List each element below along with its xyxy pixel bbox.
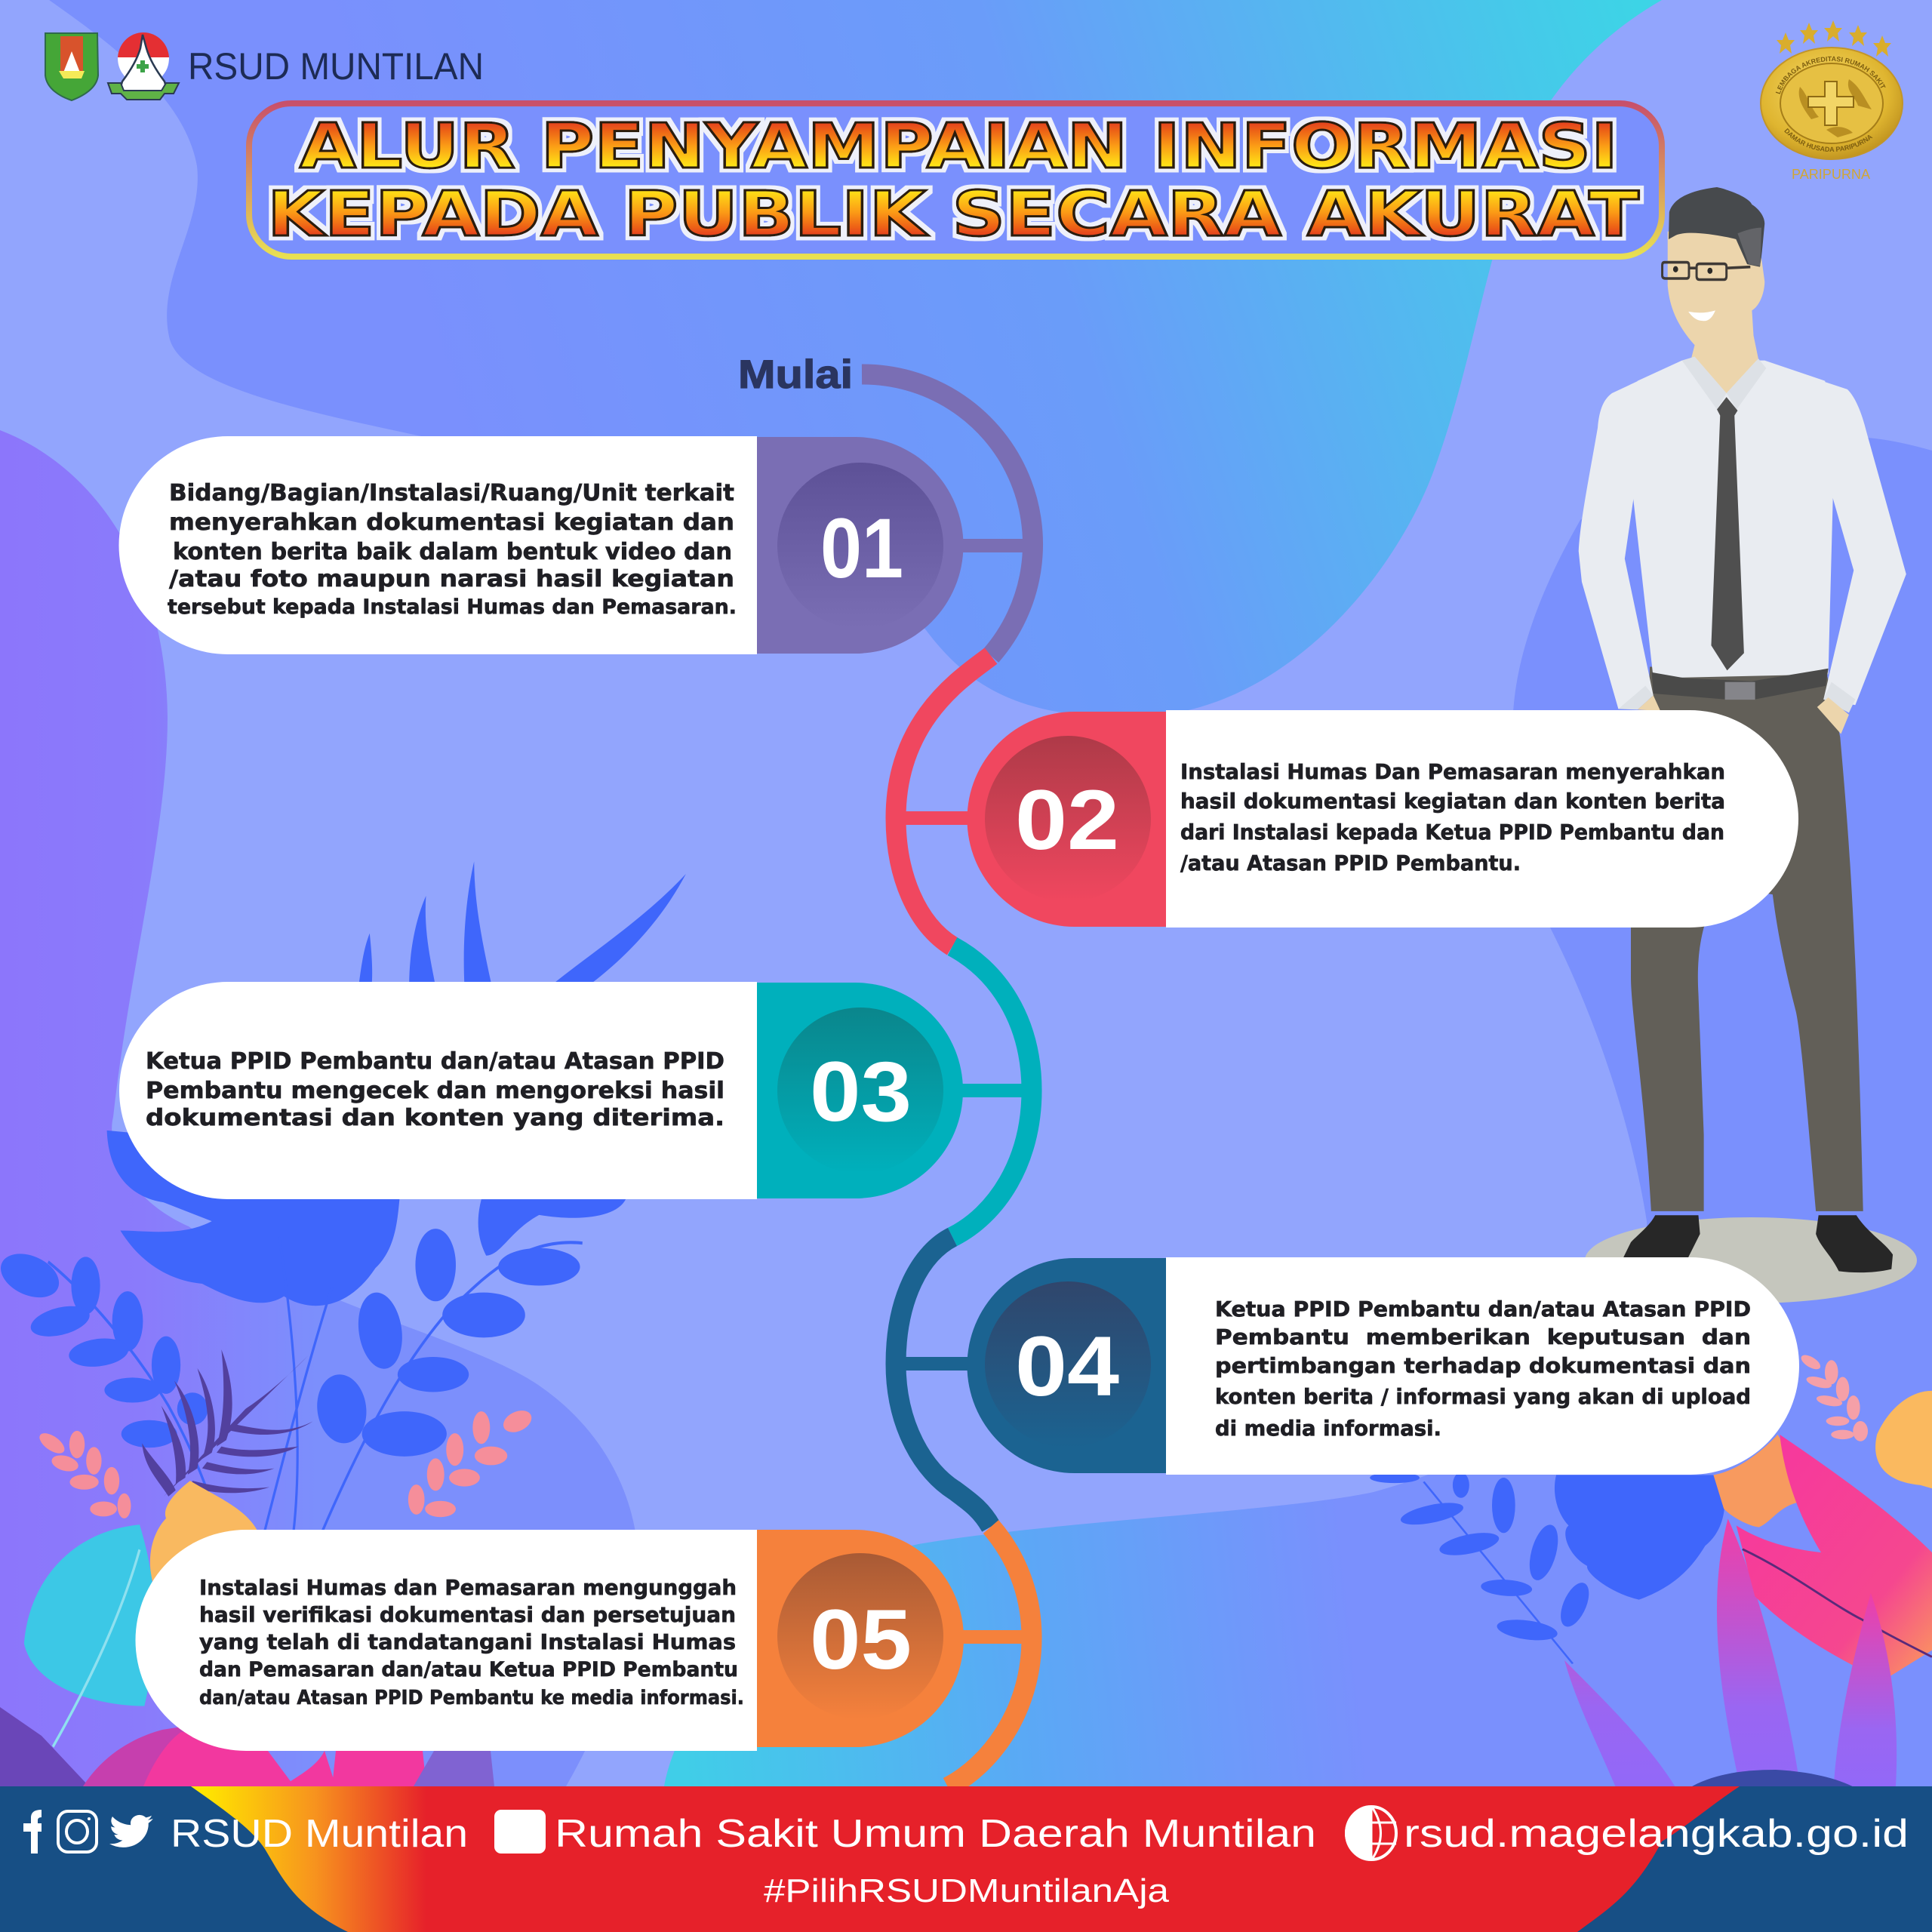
number: 02 [1015, 773, 1119, 867]
title box [249, 103, 1662, 257]
blue fronds above card 03 [358, 861, 686, 986]
red dome [118, 32, 169, 59]
white pill [1166, 1257, 1799, 1475]
number disc [777, 463, 943, 629]
spine segment 03 [952, 946, 1032, 1237]
step text: Pembantu memberikan keputusan dan [1215, 1324, 1751, 1349]
connector [902, 811, 974, 825]
green cross [137, 60, 149, 72]
step text: tersebut kepada Instalasi Humas dan Pemasaran. [168, 595, 737, 619]
step text [199, 1575, 744, 1709]
logo: RSUD stupa [108, 32, 179, 100]
ground shadow [1585, 1217, 1917, 1303]
hashtag: #PilihRSUDMuntilanAja [764, 1872, 1170, 1909]
yellow leaf [1875, 1391, 1932, 1488]
panel: step 01 [119, 436, 1026, 654]
tie [1711, 397, 1744, 670]
footer blue base [0, 1786, 1932, 1932]
gold coin [1761, 48, 1903, 159]
legs and shoes [1623, 667, 1893, 1272]
number disc [985, 736, 1151, 902]
spine segment 04 [896, 1237, 991, 1527]
brand name: RSUD MUNTILAN [188, 45, 484, 88]
white pill [1166, 710, 1798, 928]
step text: /atau foto maupun narasi hasil kegiatan [169, 566, 734, 592]
coin map blotches [1799, 79, 1872, 137]
man illustration [1579, 187, 1917, 1303]
trousers [1631, 667, 1863, 1211]
plants: bottom right cluster [1370, 1352, 1932, 1789]
collar [1682, 357, 1766, 409]
magenta leaf [83, 1724, 298, 1786]
step text: di media informasi. [1215, 1416, 1441, 1441]
connector [958, 539, 1026, 552]
number disc [985, 1281, 1151, 1447]
step text: dan/atau Atasan PPID Pembantu ke media informasi. [199, 1687, 744, 1709]
shield stupa [63, 51, 80, 72]
left shoe [1623, 1215, 1700, 1259]
number: 01 [820, 501, 903, 595]
number block [968, 712, 1166, 927]
green ribbon [108, 83, 179, 100]
tall violet leaves [1564, 1518, 1801, 1789]
number block [757, 437, 963, 654]
panel: step 04 [902, 1257, 1799, 1475]
blue monstera leaf [1555, 1475, 1724, 1600]
pink sprig right [408, 1407, 534, 1517]
belt [1652, 669, 1829, 700]
cuffs [1618, 682, 1855, 712]
upper body [1579, 187, 1906, 734]
coin inner ring [1780, 63, 1883, 143]
step text: menyerahkan dokumentasi kegiatan dan [169, 509, 734, 536]
icon: white square [494, 1810, 546, 1854]
white pill [136, 1530, 757, 1751]
panel: step 03 [119, 982, 1026, 1199]
social handle: RSUD Muntilan [171, 1812, 468, 1856]
title line 2: KEPADA PUBLIK SECARA AKURAT [267, 179, 1639, 251]
white pill [119, 982, 757, 1199]
shield base [59, 71, 85, 78]
accreditation medal [1760, 20, 1903, 182]
left arm [1579, 380, 1654, 709]
step text: dokumentasi dan konten yang diterima. [146, 1105, 724, 1131]
step text [168, 480, 737, 619]
right shoe [1816, 1215, 1893, 1272]
background blob: top gradient [49, 0, 1662, 717]
step text: Ketua PPID Pembantu dan/atau Atasan PPID [146, 1048, 724, 1075]
step text: dari Instalasi kepada Ketua PPID Pembantu dan [1180, 820, 1724, 844]
step text [146, 1048, 724, 1131]
pink sprig [1798, 1352, 1868, 1441]
hospital name: Rumah Sakit Umum Daerah Muntilan [555, 1812, 1316, 1856]
background blob: right and bottom gradient [664, 437, 1932, 1786]
step text [1215, 1297, 1751, 1441]
step text: Pembantu mengecek dan mengoreksi hasil [146, 1078, 724, 1104]
plants: bottom left coloured leaves [0, 1707, 494, 1786]
grey hair side [1737, 228, 1761, 266]
neck and face [1668, 229, 1764, 393]
title frame [249, 103, 1662, 257]
tall violet leaf front [1834, 1593, 1897, 1789]
spine segment 01 [862, 374, 1033, 656]
white pill [119, 436, 757, 654]
pink leaf [143, 1732, 294, 1786]
step text: Instalasi Humas Dan Pemasaran menyerahkan [1180, 759, 1725, 784]
number: 03 [810, 1044, 912, 1139]
smile [1688, 310, 1715, 321]
coin ring text top: LEMBAGA AKREDITASI RUMAH SAKIT [1775, 56, 1885, 94]
footer band [0, 1786, 1932, 1932]
spine segment 05 [948, 1527, 1032, 1787]
white lower dome [118, 57, 169, 82]
orange leaf [1713, 1435, 1801, 1527]
pink leaf centre [283, 1751, 426, 1786]
feather vein [1743, 1549, 1932, 1657]
orange leaf [150, 1481, 263, 1587]
purple feather fronds [142, 1349, 313, 1497]
right arm [1822, 381, 1906, 705]
coin cross [1808, 82, 1854, 125]
icon: globe [1345, 1806, 1396, 1860]
plants: left cluster [0, 861, 686, 1746]
number disc [777, 1008, 943, 1174]
step text: Bidang/Bagian/Instalasi/Ruang/Unit terkait [169, 480, 734, 506]
connector [958, 1630, 1026, 1644]
pink sprig left [37, 1429, 131, 1518]
icon: instagram [58, 1811, 97, 1852]
number: 04 [1015, 1319, 1119, 1414]
blue branch leaves [0, 1229, 580, 1457]
step text: hasil verifikasi dokumentasi dan persetujuan [199, 1602, 736, 1627]
title line 1: ALUR PENYAMPAIAN INFORMASI [300, 111, 1618, 183]
glasses [1663, 263, 1750, 280]
coin ring text bottom: DAMAR HUSADA PARIPURNA [1784, 128, 1873, 152]
hands [1638, 696, 1849, 734]
step text: dan Pemasaran dan/atau Ketua PPID Pembantu [199, 1658, 738, 1681]
purple leaf [0, 1707, 89, 1786]
blue monstera leaf [107, 1131, 626, 1306]
connector [958, 1084, 1026, 1097]
dark arc [1689, 1770, 1857, 1789]
connector [902, 1357, 974, 1371]
muted violet leaf [414, 1751, 494, 1786]
panel: step 02 [902, 710, 1798, 928]
number: 05 [810, 1592, 912, 1687]
rating: PARIPURNA [1792, 167, 1870, 182]
number block [968, 1258, 1166, 1473]
cyan leaf vein [53, 1549, 140, 1746]
step text: konten berita / informasi yang akan di upload [1215, 1384, 1751, 1409]
panel: step 05 [136, 1530, 1026, 1751]
step text: Ketua PPID Pembantu dan/atau Atasan PPID [1215, 1297, 1751, 1321]
background blob: left purple [0, 430, 638, 1786]
step text: yang telah di tandatangani Instalasi Humas [199, 1629, 736, 1654]
step text: Instalasi Humas dan Pemasaran mengunggah [199, 1575, 737, 1600]
footer red wave [191, 1786, 1740, 1932]
stupa body [119, 35, 168, 92]
spine segment 02 [896, 656, 991, 946]
website: rsud.magelangkab.go.id [1404, 1812, 1909, 1856]
step text: hasil dokumentasi kegiatan dan konten berita [1180, 789, 1725, 814]
icon: twitter [109, 1815, 153, 1847]
torso [1632, 361, 1833, 678]
number disc [777, 1553, 943, 1719]
blue branch stems [48, 1237, 583, 1531]
step text: pertimbangan terhadap dokumentasi dan [1215, 1353, 1751, 1378]
number block [757, 1530, 964, 1747]
logo: Magelang regency shield [45, 33, 98, 100]
pink feather leaf [1737, 1435, 1932, 1681]
eyes [1673, 266, 1712, 274]
step text: /atau Atasan PPID Pembantu. [1180, 851, 1521, 875]
five stars [1777, 20, 1891, 57]
start label: Mulai [738, 352, 853, 397]
blue branch leaves [1370, 1472, 1595, 1644]
step text [1180, 759, 1725, 875]
flow spine [862, 374, 1033, 1787]
step text: konten berita baik dalam bentuk video dan [173, 539, 732, 565]
shield centre [60, 36, 83, 72]
cyan leaf [24, 1524, 155, 1706]
number block [757, 983, 963, 1198]
hair [1669, 187, 1764, 267]
blue branch stem [1423, 1481, 1573, 1663]
icon: facebook [23, 1810, 42, 1854]
buckle [1725, 682, 1755, 700]
